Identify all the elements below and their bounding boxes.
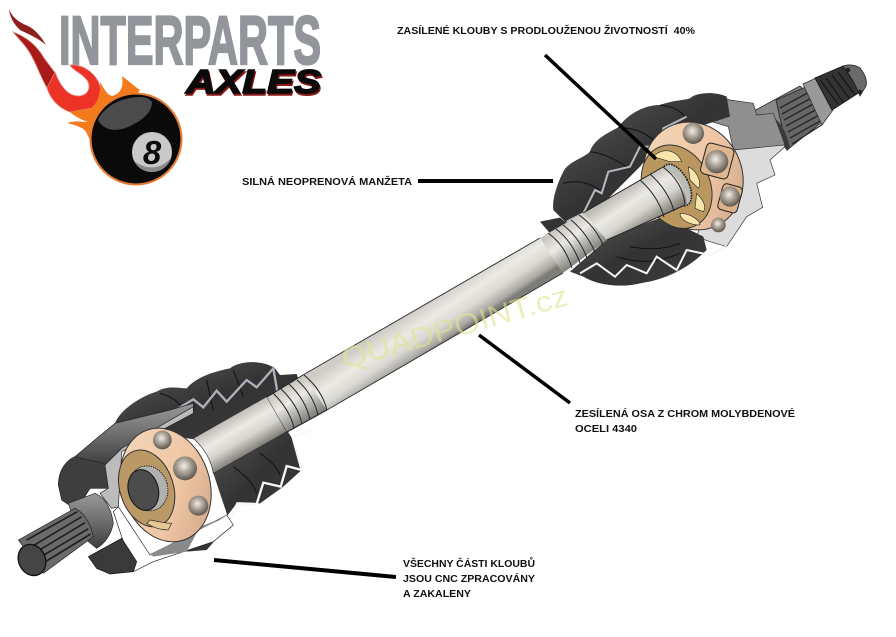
housing grey section [683,93,785,150]
lower rubber boot [187,429,313,552]
right thick shaft section [583,167,687,240]
right stub shaft with splines [752,65,866,151]
icon: eight ball: 8 [143,134,162,171]
left thick shaft section [193,397,287,473]
upper rubber boot [540,93,730,233]
callout text: reinforced axle [575,407,795,435]
right ribbed shaft section [540,213,607,273]
icon: flames [9,9,182,184]
callout text: CNC parts [403,556,535,600]
callout text: reinforced axle: OCELI 4340 [575,423,637,435]
callout text: reinforced axle: ZESÍLENÁ OSA Z CHROM MOLYBDENOVÉ [575,407,795,420]
left ribbed shaft section [267,375,327,432]
knurled hub [123,461,173,515]
callout line: sealed joints [545,55,656,159]
left CV joint [13,362,313,580]
lower white housing band [113,507,233,572]
main shaft [303,238,563,410]
axle shaft assembly [13,65,866,580]
upper rubber boot [115,362,300,440]
joint cage and balls [106,416,227,557]
housing [58,403,193,510]
joint cage and balls [626,106,761,246]
callout line: neoprene boot [418,179,553,183]
callout text: CNC parts: VŠECHNY ČÁSTI KLOUBŮ [403,556,535,570]
callout text: CNC parts: A ZAKALENY [403,588,471,600]
lower rubber boot [570,217,727,286]
right CV joint [540,93,785,286]
callout line: CNC parts [214,560,396,577]
logo wordmark AXLES: AXLES [186,65,322,102]
callout line: reinforced axle [479,335,570,403]
lower housing shell [88,538,137,574]
icon: eight ball [92,94,180,184]
logo: Interparts Axles [9,2,322,184]
light cut-away housing [697,132,785,247]
knurled hub [656,160,698,210]
logo wordmark INTERPARTS: INTERPARTS [59,2,321,79]
callout text: neoprene boot: SILNÁ NEOPRENOVÁ MANŽETA [242,175,412,188]
watermark QUADPOINT.cz: QUADPOINT.cz [338,280,572,376]
main shaft edges [303,238,563,410]
callout text: CNC parts: JSOU CNC ZPRACOVÁNY [403,572,535,585]
callout text: sealed joints: ZASÍLENÉ KLOUBY S PRODLOUŽENOU ŽIVOTNOSTÍ 40% [397,24,696,37]
logo wordmark AXLES: AXLES [185,63,321,100]
stub shaft with splines [13,493,113,580]
